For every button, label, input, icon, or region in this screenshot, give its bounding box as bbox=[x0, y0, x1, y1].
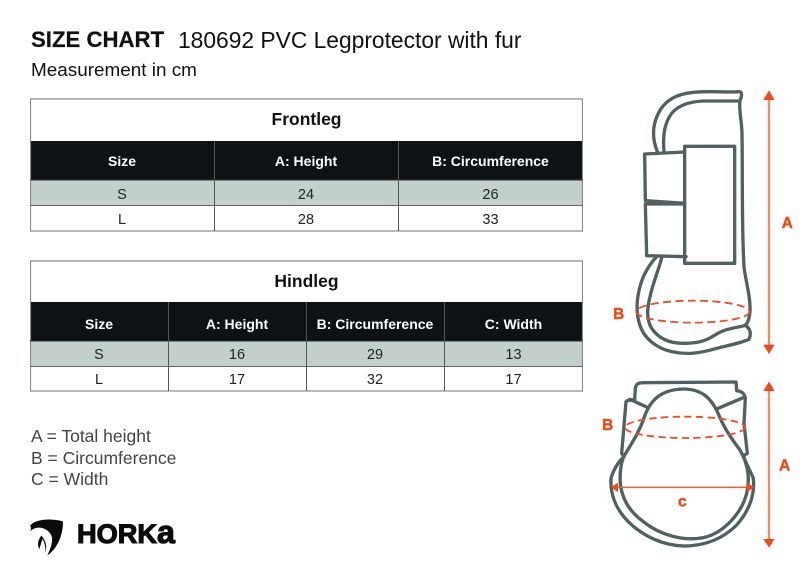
row: size L: L bbox=[118, 212, 126, 228]
row: size S: S bbox=[94, 347, 104, 363]
heading: frontleg: Frontleg bbox=[272, 109, 342, 129]
row: size S: 16 bbox=[229, 347, 245, 363]
legend: measurement key: C = Width bbox=[31, 469, 108, 489]
header row: A: Height bbox=[275, 153, 337, 169]
dashed ellipse B bbox=[625, 417, 745, 438]
diagram: front boot bbox=[613, 90, 793, 355]
arrow C bbox=[611, 483, 754, 492]
header row: C: Width bbox=[485, 316, 542, 332]
row: size S: 24 bbox=[298, 187, 314, 203]
boot outline bbox=[637, 92, 750, 353]
label A: A bbox=[779, 457, 790, 474]
row: size L: 28 bbox=[298, 212, 314, 228]
arrow A bbox=[763, 90, 775, 354]
logo: Horka bbox=[30, 515, 176, 556]
label A: A bbox=[782, 215, 793, 232]
panel: hindleg table bbox=[30, 260, 583, 392]
header row: Size bbox=[85, 316, 113, 332]
row: size L: 17 bbox=[229, 372, 245, 388]
header row: Size bbox=[108, 153, 136, 169]
subtitle: measurement unit: Measurement in cm bbox=[31, 60, 197, 81]
panel: frontleg table bbox=[30, 98, 583, 232]
row: size S bbox=[94, 347, 522, 363]
row: size S: S bbox=[117, 187, 127, 203]
arrow A bbox=[763, 382, 775, 548]
dashed ellipse B bbox=[636, 301, 750, 323]
title: 180692 PVC Legprotector with fur bbox=[178, 27, 521, 53]
row: size L: 33 bbox=[482, 212, 499, 228]
header row: A: Height bbox=[206, 316, 268, 332]
label B: B bbox=[602, 417, 613, 434]
header row: B: Circumference bbox=[432, 153, 549, 169]
diagram: back boot bbox=[602, 380, 790, 548]
label C: c bbox=[678, 494, 687, 511]
legend: measurement key: A = Total height bbox=[31, 426, 151, 446]
row: size S: 13 bbox=[505, 347, 522, 363]
heading: hindleg: Hindleg bbox=[274, 271, 339, 291]
table frame background bbox=[30, 98, 583, 232]
label B: B bbox=[613, 306, 624, 323]
header row bbox=[108, 153, 549, 169]
boot outline bbox=[611, 382, 754, 546]
header row bbox=[85, 316, 542, 332]
row: size L bbox=[118, 212, 499, 228]
row: size L bbox=[95, 372, 522, 388]
legend: measurement key: B = Circumference bbox=[31, 448, 176, 468]
row: size S: 26 bbox=[482, 187, 499, 203]
icon: horse head bbox=[30, 519, 63, 556]
row: size L: L bbox=[95, 372, 103, 388]
wordmark: HORKa bbox=[77, 515, 175, 550]
table frame background bbox=[30, 260, 583, 392]
row: size L: 17 bbox=[505, 372, 522, 388]
legend: measurement key bbox=[31, 426, 176, 489]
header row: B: Circumference bbox=[317, 316, 433, 332]
title: SIZE CHART bbox=[31, 27, 164, 52]
row: size S: 29 bbox=[367, 347, 383, 363]
row: size S bbox=[117, 187, 499, 203]
row: size L: 32 bbox=[367, 372, 383, 388]
